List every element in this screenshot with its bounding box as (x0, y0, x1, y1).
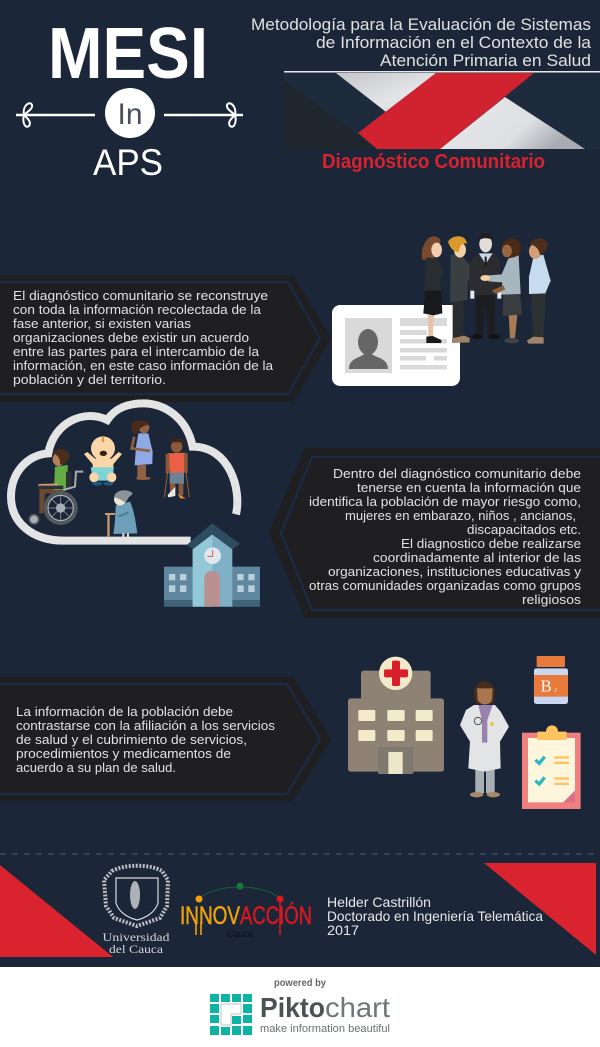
panel text: La información de la población debe (16, 704, 233, 719)
panel: diagnostico reconstruction (0, 275, 331, 402)
panel text (309, 466, 582, 607)
person: man in blue shirt (527, 238, 551, 344)
panel text: contrastarse con la afiliación a los servicios (16, 718, 276, 733)
icon: business people group (422, 233, 551, 344)
panel text: organizaciones debe existir un acuerdo (13, 330, 249, 345)
header description: Metodología para la Evaluación de Sistemas (251, 15, 591, 34)
panel text: discapacitados etc. (467, 522, 581, 537)
panel text: tenerse en cuenta la información que (357, 480, 581, 495)
panel text: otras comunidades organizadas como grupos (309, 578, 582, 593)
panel text: fase anterior, si existen varias (13, 316, 192, 331)
header logo: MESI In APS (16, 14, 243, 183)
panel text: población y del territorio. (13, 372, 166, 387)
author credits: Helder Castrillón (327, 894, 431, 910)
header description (251, 15, 592, 70)
author credits: 2017 (327, 922, 359, 938)
panel text: organizaciones, instituciones educativas y (328, 564, 582, 579)
footer red triangle right (484, 863, 596, 955)
panel: health plan affiliation (0, 677, 331, 801)
left arrow ornament (16, 103, 95, 127)
icon: school building (164, 523, 260, 607)
figure: person in wheelchair (29, 449, 83, 524)
panel text: El diagnostico debe realizarse (401, 536, 581, 551)
clipboard checklist (522, 725, 581, 809)
header banner (284, 71, 600, 149)
logo: Universidad del Cauca: del Cauca (109, 942, 164, 956)
figure: person on crutches (164, 438, 189, 498)
panel text: procedimientos y medicamentos de (16, 746, 231, 761)
title MESI: MESI (48, 14, 208, 94)
person: blond man (448, 236, 481, 343)
panel text: identifica la población de mayor riesgo como, (309, 494, 581, 509)
figure: crying baby (84, 436, 122, 486)
panel text: coordinadamente al interior de las (373, 550, 582, 565)
panel text (16, 704, 276, 775)
panel text: Dentro del diagnóstico comunitario debe (333, 466, 581, 481)
hospital (348, 657, 444, 774)
Piktochart tagline: make information beautiful (260, 1023, 390, 1035)
icon: hospital, doctor, medicine and checklist (348, 656, 581, 809)
person: woman in gray blouse (480, 238, 522, 343)
author credits (327, 894, 543, 938)
logo: Universidad del Cauca (102, 866, 170, 956)
Piktochart wordmark: Pikto (260, 992, 325, 1023)
panel text (13, 288, 274, 387)
footer red triangle left (0, 865, 113, 957)
header description: Atención Primaria en Salud (380, 51, 591, 70)
panel text: información, en este caso información de la (13, 358, 274, 373)
Piktochart logo mark (210, 994, 252, 1035)
icon: ID card (332, 305, 460, 386)
vitamin bottle: B (541, 677, 552, 696)
person: woman in skirt (422, 236, 444, 343)
badge In (105, 88, 155, 138)
vitamin bottle: 2 (554, 688, 557, 694)
powered by label: powered by (274, 978, 326, 989)
author credits: Doctorado en Ingeniería Telemática (327, 908, 543, 924)
section heading: Diagnóstico Comunitario (322, 151, 545, 173)
footer: powered by Piktochart: chart (325, 992, 390, 1023)
panel text: religiosos (522, 592, 582, 607)
logo: Innovacción Cauca: INNOV (180, 902, 240, 930)
panel text: de salud y el cubrimiento de servicios, (16, 732, 247, 747)
panel text: mujeres en embarazo, niños , ancianos, (345, 508, 576, 523)
panel text: acuerdo a su plan de salud. (16, 760, 176, 775)
subtitle APS: APS (93, 142, 163, 183)
figure: pregnant woman (132, 421, 153, 480)
header description: de Información en el Contexto de la (316, 33, 592, 52)
badge In: In (117, 98, 143, 131)
doctor (460, 682, 509, 797)
footer: powered by Piktochart (0, 967, 600, 1047)
logo: Innovacción Cauca: ACCIÓN (240, 901, 312, 930)
panel: at-risk population (269, 448, 600, 618)
cloud outline (11, 403, 237, 541)
icon: cloud with at-risk population (11, 403, 237, 541)
panel text: entre las partes para el intercambio de la (13, 344, 260, 359)
person: man in black suit (469, 233, 501, 339)
panel text: El diagnóstico comunitario se reconstruye (13, 288, 268, 303)
logo: Universidad del Cauca: Universidad (102, 930, 170, 944)
logo: Innovacción Cauca (180, 882, 312, 939)
figure: elderly woman with cane (105, 490, 137, 537)
right arrow ornament (164, 103, 243, 127)
panel text: con toda la información recolectada de la (13, 302, 262, 317)
logo: Innovacción Cauca: Cauca (227, 929, 253, 939)
vitamin bottle (534, 656, 568, 704)
